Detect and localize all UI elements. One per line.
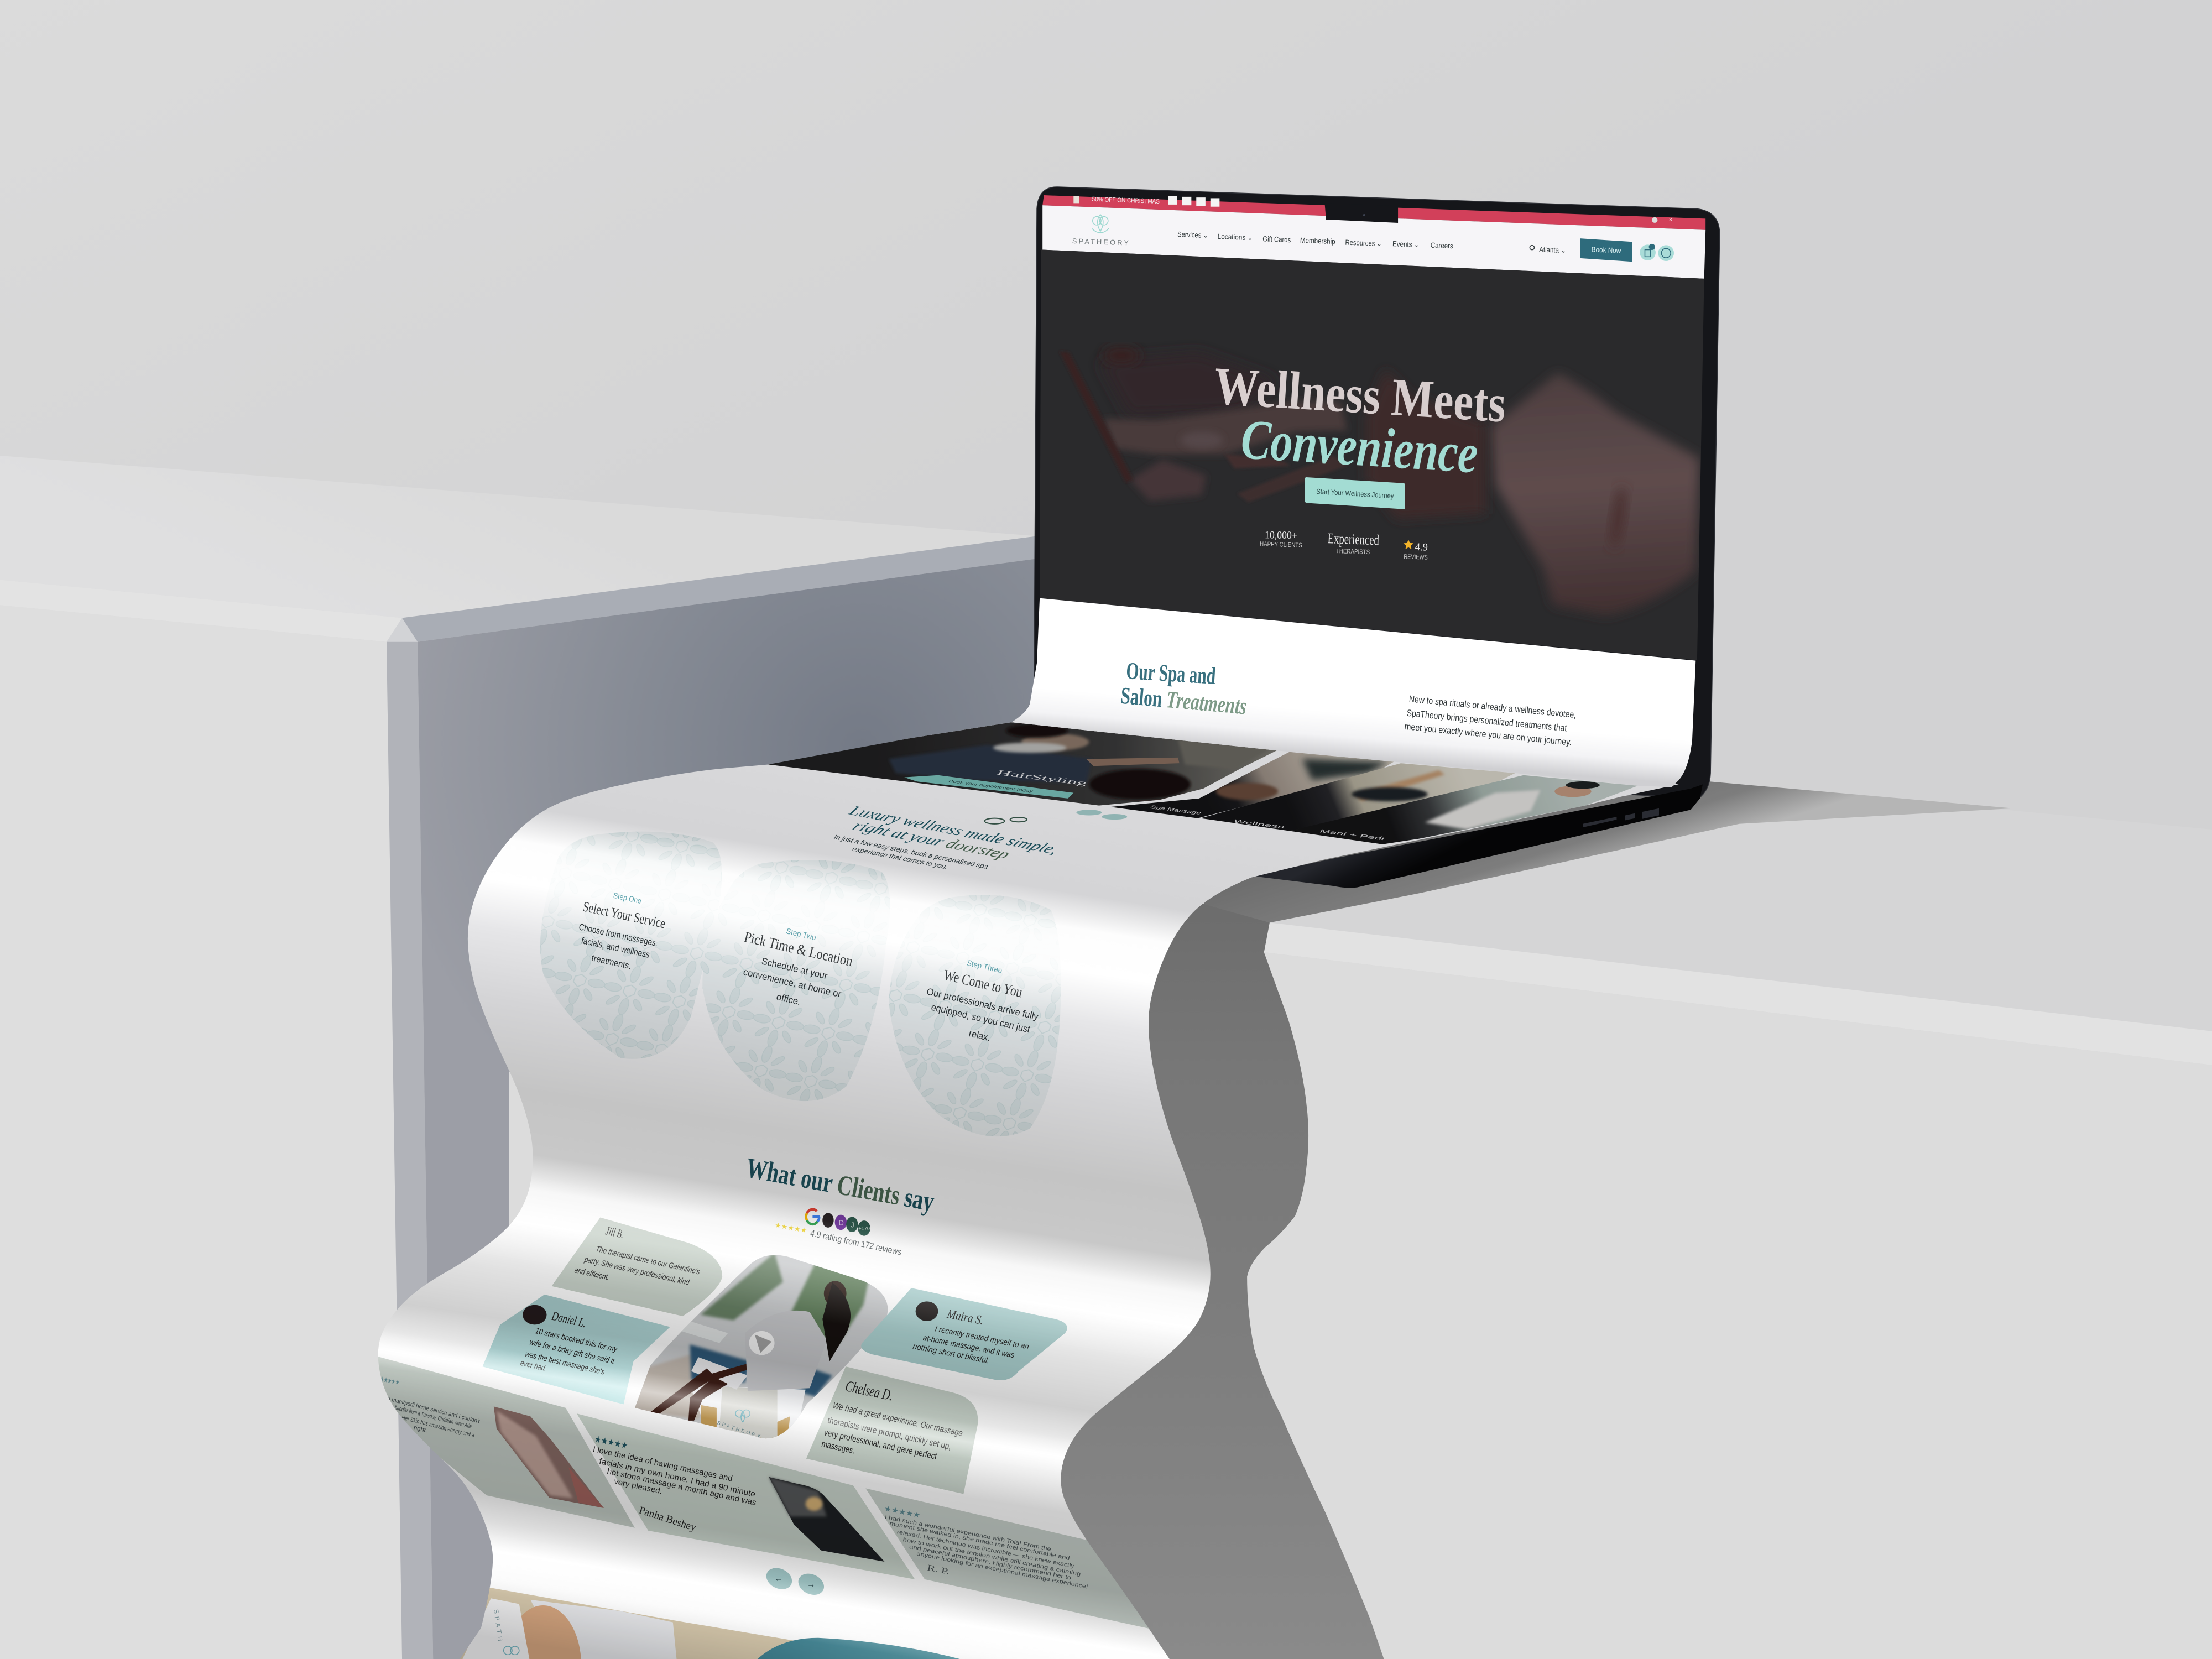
treatments heading: Our Spa and (1125, 658, 1217, 690)
section heading: luxury wellness (832, 803, 1063, 870)
hero stats: 4.9 (1415, 541, 1428, 554)
screen curl with treatments intro (1011, 598, 1695, 787)
step one text: treatments. (591, 953, 632, 971)
card: Jill B. (551, 1218, 722, 1316)
step one text: Select Your Service (582, 898, 667, 931)
card: Jill B.: and efficient. (573, 1266, 610, 1282)
left block (0, 456, 1037, 1659)
rating row: D (839, 1219, 844, 1227)
carousel arrows (763, 1564, 827, 1599)
cart and account icons (1640, 244, 1674, 261)
carousel arrows: → (807, 1580, 815, 1589)
photo one: hair styling: Book your appointment today (947, 779, 1034, 794)
card: Chelsea D.: We had a great experience. Our massage (832, 1401, 963, 1438)
card: Chelsea D. (806, 1366, 978, 1494)
card: lower middle review: ★★★★★ (593, 1434, 629, 1451)
photo four: robe (1284, 773, 1644, 851)
shadow of laptop on table (1192, 781, 2013, 922)
card: lower left review: Her Skin has amazing energy and a (401, 1415, 475, 1439)
treatments description (1404, 693, 1577, 748)
hero stats: 10,000+ (1265, 529, 1297, 541)
hero stats: THERAPISTS (1336, 547, 1370, 556)
card: lower right review: relaxed. Her technique was incredible — she knew exactly (896, 1529, 1076, 1569)
step one text: Choose from massages, (578, 921, 659, 948)
card: Jill B.: Jill B. (604, 1224, 625, 1241)
hero button: Start Your Wellness Journey (1316, 487, 1394, 500)
step three text: relax. (968, 1027, 992, 1043)
card: Jill B.: party. She was very professional, kind (583, 1255, 691, 1287)
step two text: convenience, at home or (742, 966, 842, 999)
card: lower right review: anyone looking for an exceptional massage experience! (916, 1551, 1088, 1590)
menu items (1177, 230, 1566, 254)
card: lower middle review: facials in my own home. I had a 90 minute (598, 1457, 756, 1499)
card: video photo: SPATHEORY (716, 1420, 761, 1439)
foot photo (494, 1406, 604, 1508)
logo: SPATHEORY (1072, 237, 1129, 247)
card: lower middle review: Panha Beshey (638, 1504, 698, 1534)
hero stats (1260, 529, 1428, 561)
menu items: Careers (1431, 241, 1453, 250)
card: Daniel L.: was the best massage she's (524, 1350, 606, 1377)
photo two: facial (1100, 748, 1404, 825)
step two text: Schedule at your (760, 956, 829, 981)
card: lower middle review: hot stone massage a month ago and was (606, 1467, 757, 1507)
section heading: luxury wellness: experience that comes to you. (851, 845, 950, 870)
flat photo strip (762, 712, 1644, 851)
card: Maira S.: nothing short of blissful. (912, 1342, 990, 1366)
section heading: luxury wellness: right at your doorstep (849, 818, 1014, 862)
card: lower right review: ★★★★★ (884, 1504, 921, 1520)
step two text: Pick Time & Location (743, 928, 854, 969)
rating row: J (851, 1220, 854, 1229)
card: lower right review (865, 1488, 1185, 1636)
card: Chelsea D.: massages. (821, 1439, 855, 1456)
ribbon shading (353, 706, 1764, 1659)
shadow of ribbon on block (988, 903, 1384, 1659)
card: Chelsea D.: Chelsea D. (844, 1378, 894, 1405)
step three text: We Come to You (942, 967, 1024, 1000)
step three text (926, 959, 1040, 1043)
card: lower right review: how to work out the tension while still creating a calming (902, 1537, 1082, 1578)
card: lower right review: R. P. (926, 1563, 951, 1577)
section heading: luxury wellness: Luxury wellness made simple, (845, 803, 1063, 857)
clients heading: What our Clients say (744, 1152, 937, 1218)
location pin (1530, 246, 1534, 250)
card: Daniel L.: ever had. (519, 1359, 547, 1373)
rating row: 4.9 rating from 172 reviews (809, 1228, 902, 1258)
gloss over mandalas (423, 804, 1213, 1072)
step one text: facials, and wellness (580, 935, 651, 960)
step two text: Step Two (785, 927, 817, 942)
card: Jill B.: The therapist came to our Galentine's (595, 1245, 701, 1277)
logo (1072, 215, 1129, 247)
menu items: Gift Cards (1262, 234, 1291, 244)
photo two: facial: Spa Massage (1149, 805, 1203, 816)
photo three: stretching: Wellness (1232, 818, 1286, 830)
card: lower right review: and peaceful atmosphere. Highly recommend her to (909, 1544, 1072, 1582)
card: Daniel L.: 10 stars booked this for my (534, 1327, 619, 1354)
menu items: Resources ⌄ (1345, 238, 1382, 248)
book now button (1580, 238, 1632, 262)
hero stats: HAPPY CLIENTS (1260, 540, 1302, 549)
paper ribbon (353, 706, 1764, 1659)
navigation bar (1042, 205, 1705, 279)
card: Maira S.: I recently treated myself to an (934, 1324, 1030, 1352)
card: lower left review: ★★★★★ (379, 1375, 400, 1386)
step three text: Step Three (966, 959, 1003, 975)
photo four: robe: Mani + Pedi (1318, 828, 1386, 841)
step one text: Step One (613, 891, 642, 906)
laptop (1034, 187, 1720, 888)
menu items: Atlanta ⌄ (1539, 245, 1566, 254)
card: lower middle review (577, 1413, 915, 1579)
card: video photo (620, 1241, 903, 1453)
ribbon gloss highlights (353, 706, 1764, 1659)
card: lower middle review: I love the idea of having massages and (592, 1445, 733, 1483)
card: Chelsea D.: therapists were prompt, quickly set up, (827, 1415, 952, 1452)
card: lower left review (369, 1354, 635, 1528)
book now button: Book Now (1591, 245, 1621, 255)
card: Daniel L.: wife for a bday gift she said it (529, 1338, 615, 1366)
hero stats: REVIEWS (1404, 553, 1428, 561)
card: Daniel L. (482, 1295, 670, 1405)
bottom photo (451, 1587, 811, 1659)
step one text (578, 891, 667, 971)
treatments heading (1120, 658, 1248, 720)
bottom teal shape (752, 1638, 980, 1659)
rating row: ★★★★★ (774, 1221, 807, 1235)
step three text: equipped, so you can just (930, 1001, 1031, 1035)
hero stats: Experienced (1327, 530, 1380, 548)
step three text: Our professionals arrive fully (926, 985, 1040, 1022)
hero panel (1040, 250, 1704, 660)
hero headline: Wellness Meets (1213, 356, 1507, 434)
card: lower left review: right. (413, 1424, 428, 1434)
hero headline: Convenience (1239, 408, 1480, 486)
card: lower left review: I tried a mani/pedi home service and I couldn't (372, 1392, 481, 1425)
menu items: Services ⌄ (1177, 230, 1208, 239)
hero hands photo (1060, 347, 1699, 616)
hero button (1305, 477, 1405, 509)
card: Daniel L.: Daniel L. (550, 1309, 588, 1330)
rating row: +170 (858, 1225, 870, 1231)
card: lower left review: be happier from a Tuesday, Christian when Ada (389, 1403, 472, 1430)
card: Maira S.: at-home massage, and it was (922, 1334, 1015, 1360)
card: lower middle review: very pleased. (613, 1477, 663, 1496)
photo one: hair styling (762, 712, 1284, 811)
promo bar: × (1669, 217, 1672, 223)
photo one: hair styling: HairStyling (995, 769, 1089, 787)
mandala step two (702, 860, 890, 1101)
card: Maira S.: Maira S. (946, 1307, 985, 1327)
mandala step one (540, 832, 722, 1059)
treatments description: SpaTheory brings personalized treatments that (1406, 708, 1568, 734)
mandala step three (889, 895, 1061, 1136)
small teal logo marks (985, 810, 1127, 824)
treatments description: meet you exactly where you are on your journey. (1404, 721, 1572, 748)
photo three: stretching (1192, 759, 1524, 837)
step two text: office. (775, 991, 802, 1008)
google icon (806, 1209, 819, 1224)
notch (1324, 203, 1398, 223)
step two text (742, 927, 854, 1008)
right table block (1072, 781, 2212, 1659)
menu items: Membership (1300, 236, 1335, 246)
treatments heading: Salon Treatments (1120, 682, 1248, 720)
promo bar (1042, 195, 1705, 230)
card: Chelsea D.: very professional, and gave perfect (823, 1427, 938, 1462)
bottom photo: SPATH (492, 1609, 504, 1644)
menu items: Events ⌄ (1392, 239, 1420, 249)
section heading: luxury wellness: In just a few easy steps, book a personalised spa (832, 833, 991, 870)
card: Maira S. (861, 1288, 1067, 1380)
hero headline (1213, 356, 1507, 486)
menu items: Locations ⌄ (1217, 232, 1253, 242)
room photo (769, 1477, 884, 1562)
laptop bezel (1034, 187, 1720, 799)
laptop base (1253, 784, 1703, 888)
promo bar: 50% OFF ON CHRISTMAS (1092, 196, 1160, 205)
rating row (774, 1209, 902, 1258)
card: lower right review: I had such a wonderful experience with Tola! From the (884, 1514, 1052, 1553)
card: lower right review: moment she walked in, she made me feel comfortable and (889, 1521, 1071, 1562)
carousel arrows: ← (775, 1574, 783, 1584)
treatments description: New to spa rituals or already a wellness devotee, (1408, 693, 1577, 720)
